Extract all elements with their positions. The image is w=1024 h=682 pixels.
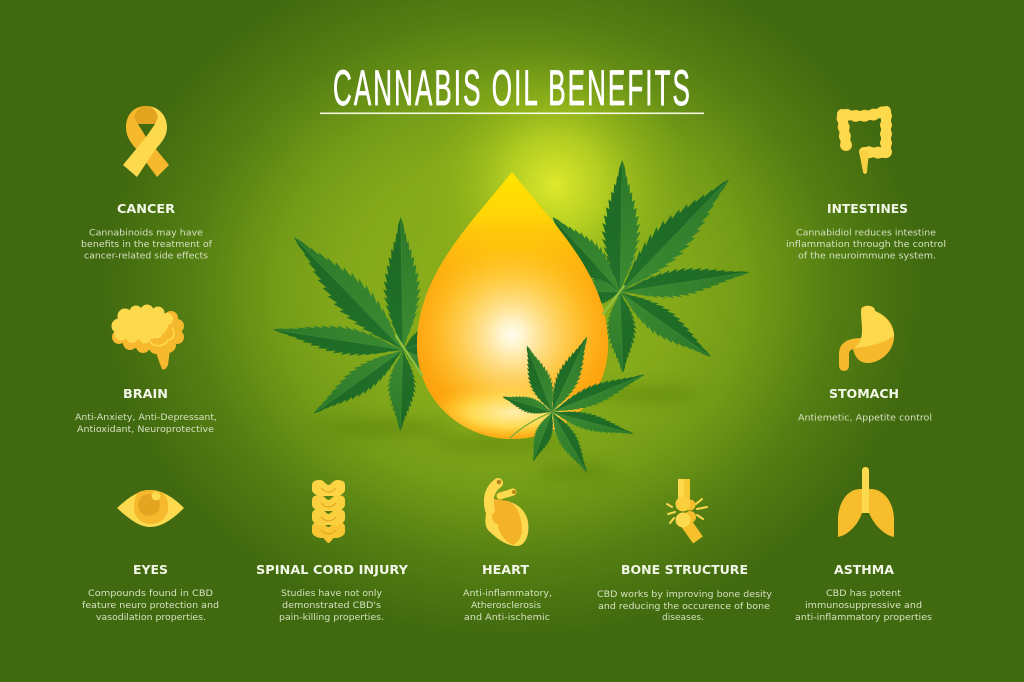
panel: asthma: CBD has potent [826, 589, 901, 599]
panel: intestines: Cannabidiol reduces intestine [796, 228, 936, 238]
panel: eyes: Compounds found in CBD [88, 589, 213, 599]
panel: intestines: inflammation through the control [786, 240, 946, 250]
panel: stomach [798, 306, 932, 424]
icon: intestines [842, 111, 886, 174]
panel: cancer: benefits in the treatment of [81, 240, 213, 250]
cannabis leaf: left [270, 217, 455, 431]
panel: heart [463, 480, 552, 623]
panel: eyes: EYES [133, 562, 168, 577]
oil drop [410, 170, 615, 442]
cannabis leaf: right [540, 160, 752, 373]
panel: heart: Anti-inflammatory, [463, 589, 552, 599]
panel: asthma: ASTHMA [834, 562, 894, 577]
title: CANNABIS OIL BENEFITS [333, 61, 692, 116]
icon: ribbon [123, 106, 169, 177]
panel: cancer: CANCER [117, 201, 175, 216]
panel: cancer [81, 106, 213, 262]
panel: cancer: cancer-related side effects [84, 252, 208, 262]
icon: broken bone [667, 479, 707, 540]
panel: bone structure: BONE STRUCTURE [621, 562, 748, 577]
icon: stomach [844, 306, 894, 366]
panel: bone structure [597, 479, 773, 623]
panel: heart: HEART [482, 562, 529, 577]
panel: asthma [795, 467, 932, 623]
icon: eye [117, 490, 184, 527]
panel: spinal cord injury: Studies have not only [281, 589, 383, 599]
panel: spinal cord injury: demonstrated CBD's [282, 601, 381, 611]
panel: spinal cord injury: SPINAL CORD INJURY [256, 562, 409, 577]
panel: eyes: vasodilation properties. [96, 613, 206, 623]
panel: bone structure: CBD works by improving bone desity [597, 590, 773, 600]
panel: asthma: immunosuppressive and [805, 601, 922, 611]
panel: brain [75, 304, 217, 435]
panel: eyes [82, 490, 219, 623]
panel: heart: and Anti-ischemic [464, 613, 550, 623]
panel: intestines [786, 111, 946, 262]
panel: spinal cord injury: pain-killing properties. [279, 613, 384, 623]
panel: eyes: feature neuro protection and [82, 601, 219, 611]
panel: spinal cord injury [256, 480, 409, 623]
panel: brain: Anti-Anxiety, Anti-Depressant, [75, 413, 217, 423]
panel: bone structure: and reducing the occurence of bone [598, 602, 770, 612]
panel: intestines: INTESTINES [827, 201, 908, 216]
panel: heart: Atherosclerosis [471, 601, 541, 611]
icon: lungs [838, 467, 894, 537]
panel: intestines: of the neuroimmune system. [798, 252, 936, 262]
panel: cancer: Cannabinoids may have [89, 228, 203, 238]
panel: stomach: Antiemetic, Appetite control [798, 414, 932, 424]
ground shadows [315, 389, 700, 476]
panel: stomach: STOMACH [829, 386, 899, 401]
panel: brain: BRAIN [123, 386, 168, 401]
panel: bone structure: diseases. [662, 613, 704, 623]
leaf stems [396, 286, 624, 375]
icon: vertebrae [312, 480, 345, 543]
cannabis leaf: small front [500, 332, 649, 478]
icon: heart [485, 480, 528, 546]
panel: asthma: anti-inflammatory properties [795, 613, 932, 623]
icon: brain [112, 304, 184, 370]
panel: brain: Antioxidant, Neuroprotective [77, 425, 214, 435]
